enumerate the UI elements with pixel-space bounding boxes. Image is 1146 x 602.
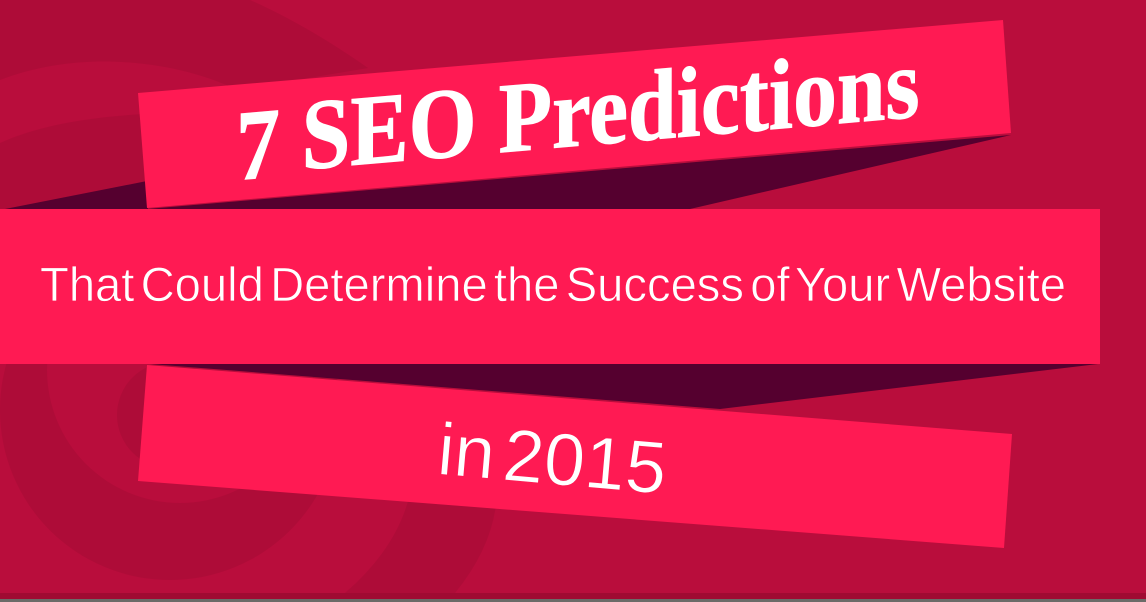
- bottom ribbon: [138, 365, 1012, 548]
- shadow fold: top ribbon: [5, 135, 1011, 209]
- title: SEO Predictions: [280, 27, 920, 193]
- title: 7: [236, 87, 280, 202]
- top ribbon: [138, 20, 1011, 208]
- middle ribbon: [0, 209, 1100, 364]
- subtitle: That Could Determine the Success of Your Website: [40, 259, 1066, 312]
- shadow fold: bottom ribbon: [150, 364, 1098, 409]
- year line: in 2015: [435, 407, 670, 510]
